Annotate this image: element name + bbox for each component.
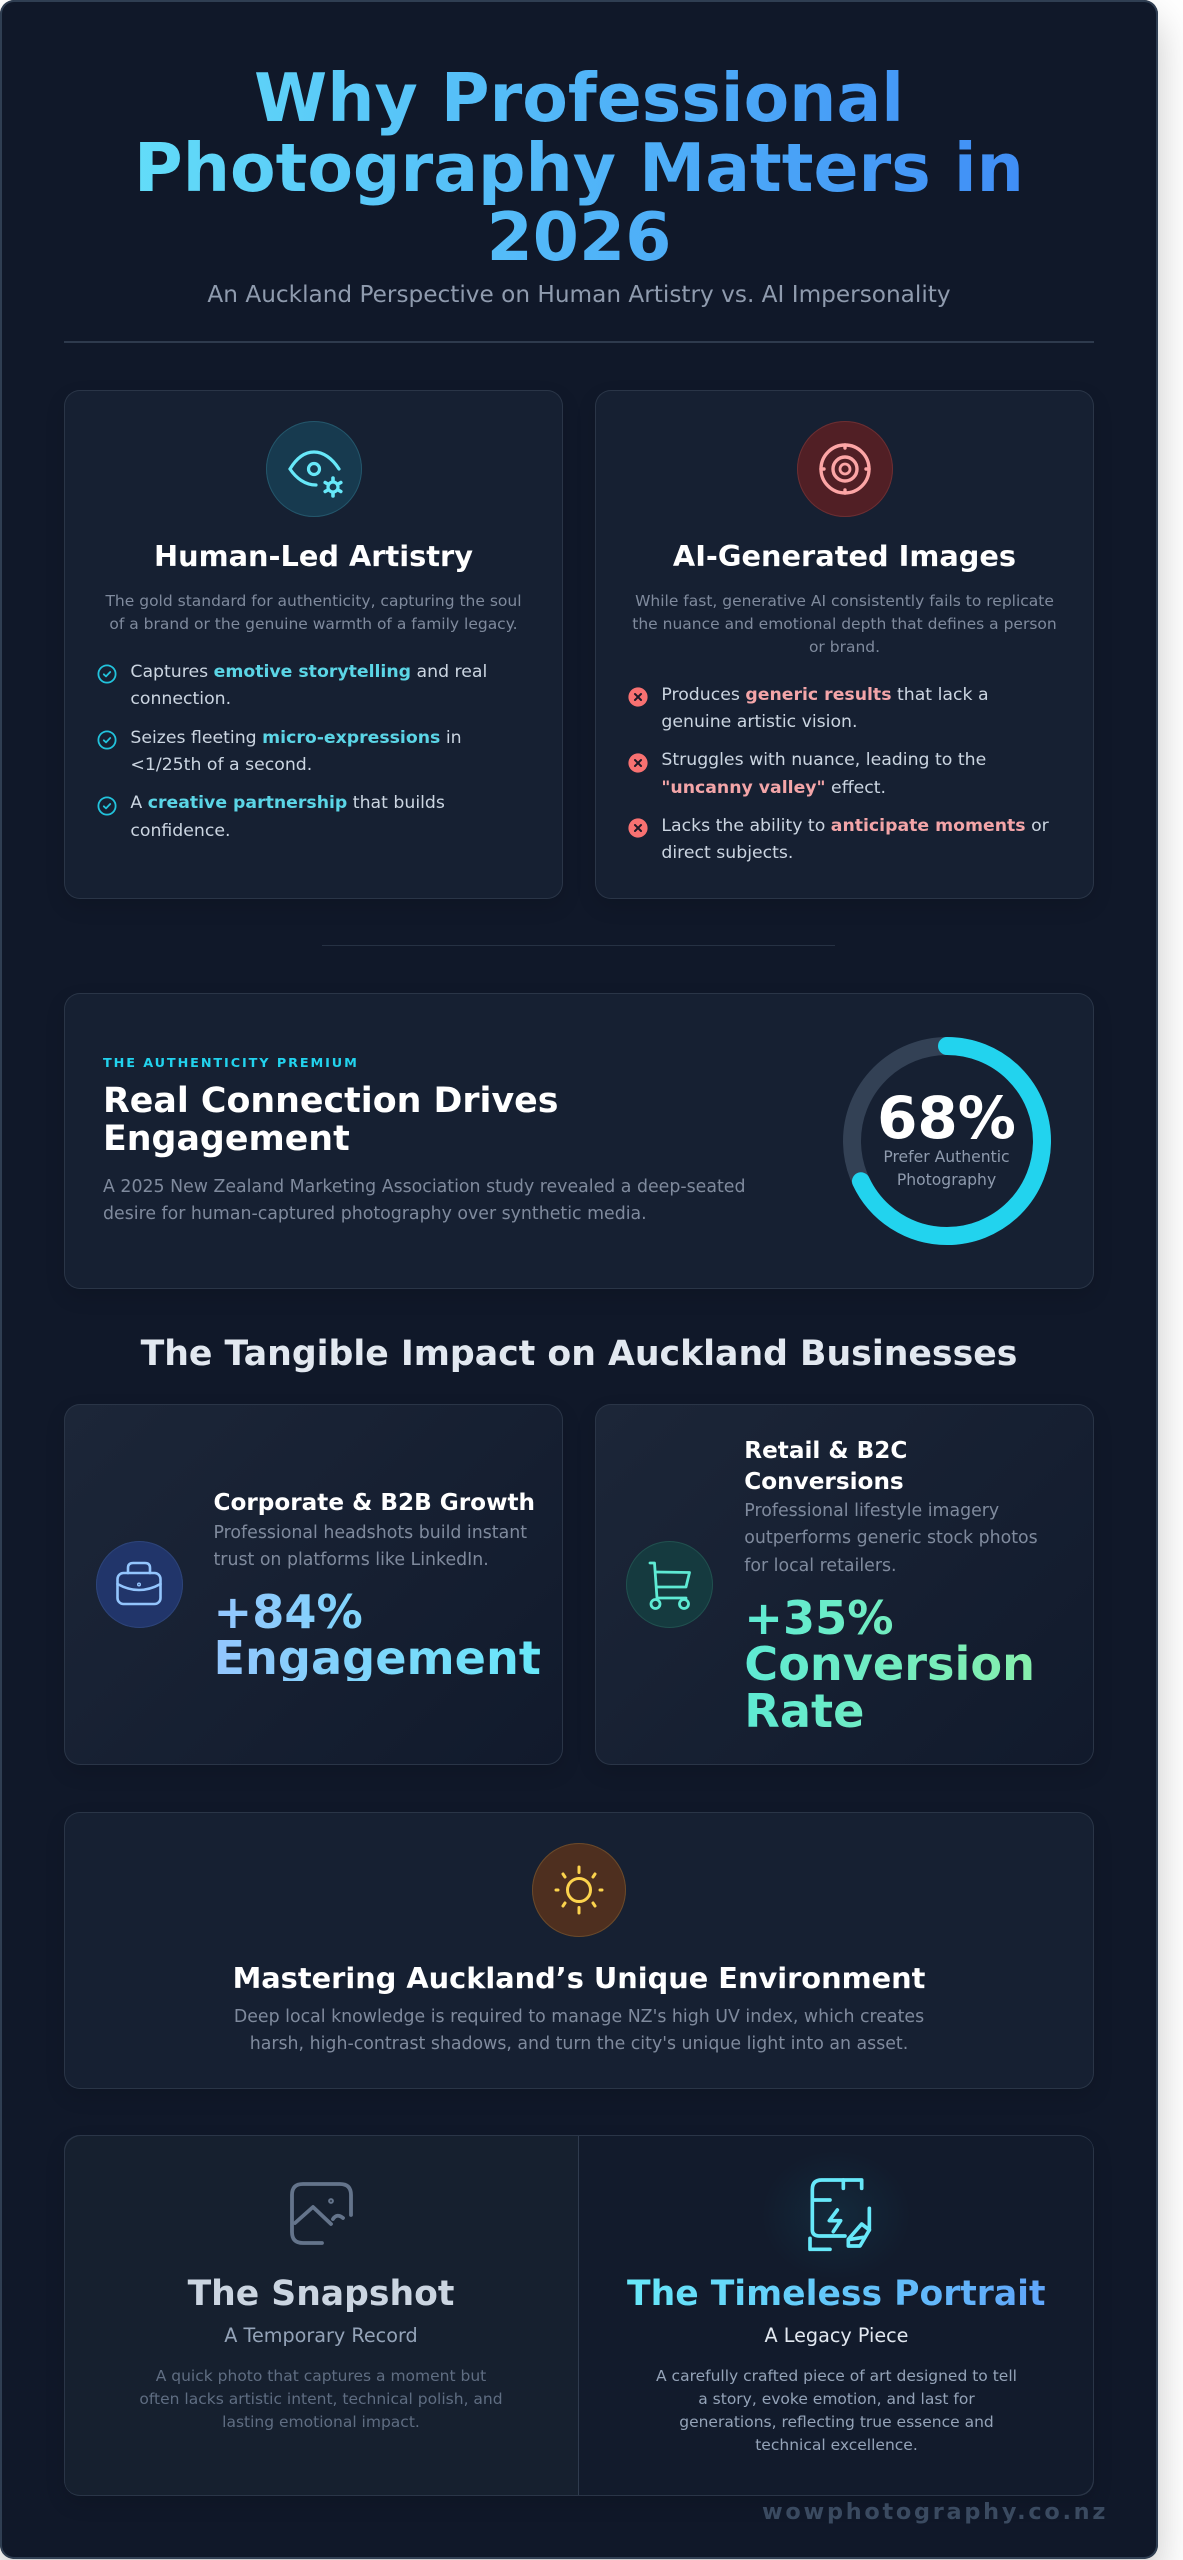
panel: retail and b2c — [595, 1404, 1094, 1765]
stat label — [883, 1148, 1010, 1189]
subtitle: temporary record: A Temporary Record — [224, 2324, 418, 2346]
sub-panel: the snapshot — [64, 2135, 579, 2496]
stat: plus 35 percent: Conversion — [744, 1637, 1035, 1691]
heading: human-led artistry: Human-Led Artistry — [154, 539, 473, 573]
list item: creative partnership: confidence. — [130, 821, 230, 841]
icon: check 3 — [98, 796, 116, 816]
stat: plus 84 percent: Engagement — [214, 1631, 541, 1685]
text: portrait description: technical excellence. — [755, 2436, 918, 2454]
heading: mastering auckland: Mastering Auckland’s Unique Environment — [233, 1961, 925, 1995]
panel: authenticity premium stat — [64, 993, 1094, 1289]
icon: sun — [532, 1843, 626, 1937]
title: Photography Matters in — [134, 129, 1024, 207]
footer: website: wowphotography.co.nz — [762, 2499, 1108, 2525]
subtitle: legacy piece: A Legacy Piece — [765, 2324, 908, 2346]
text: retail: for local retailers. — [744, 1556, 897, 1576]
text: human-led description: of a brand or the genuine warmth of a family legacy. — [109, 615, 518, 633]
stat: plus 84 percent — [214, 1588, 541, 1681]
panel: corporate and b2b — [64, 1404, 563, 1765]
text: portrait description — [656, 2366, 1017, 2454]
text: environment: Deep local knowledge is required to manage NZ's high UV index, which creates — [234, 2007, 924, 2027]
list item: anticipate moments: Lacks the ability to anticipate moments or — [661, 816, 1049, 836]
heading: ai-generated images: AI-Generated Images — [673, 539, 1016, 573]
text: snapshot description: A quick photo that captures a moment but — [156, 2366, 486, 2384]
icon: ai lens — [796, 421, 892, 517]
text: snapshot description: often lacks artistic intent, technical polish, and — [139, 2390, 503, 2408]
icon: check 1 — [98, 664, 116, 684]
icon: cross 3 — [628, 818, 648, 838]
icon: image placeholder — [290, 2182, 353, 2245]
panel: snapshot vs portrait comparison — [64, 2135, 1094, 2496]
stat label: Photography — [897, 1171, 996, 1189]
stat: plus 35 percent — [744, 1595, 1035, 1734]
title — [0, 64, 1158, 273]
text: snapshot description: lasting emotional impact. — [222, 2412, 420, 2430]
heading: the snapshot: The Snapshot — [188, 2274, 454, 2314]
list item: creative partnership: A creative partnership that builds — [130, 793, 445, 813]
heading: real connection — [103, 1080, 558, 1159]
heading: retail and b2c — [744, 1438, 907, 1495]
text: human-led description — [105, 592, 522, 633]
subtitle: An Auckland Perspective on Human Artistry vs. AI Impersonality — [207, 281, 951, 308]
heading: retail and b2c: Conversions — [744, 1469, 904, 1495]
list item: micro-expressions: <1/25th of a second. — [130, 755, 312, 775]
text: snapshot description — [139, 2366, 503, 2430]
title: Why Professional — [254, 59, 904, 137]
icon: eye with gear — [266, 421, 362, 517]
heading: real connection: Real Connection Drives — [103, 1080, 558, 1120]
heading: the timeless portrait: The Timeless Portrait — [627, 2274, 1046, 2314]
text: portrait description: generations, reflecting true essence and — [679, 2412, 994, 2430]
panel: ai-generated images — [595, 390, 1094, 899]
list item: anticipate moments: direct subjects. — [661, 843, 793, 863]
list item: uncanny valley: "uncanny valley" effect. — [661, 778, 886, 798]
text: retail — [744, 1501, 1038, 1576]
list item: generic results: Produces generic results that lack a — [661, 685, 989, 705]
panel: auckland environment — [64, 1812, 1094, 2089]
sub-panel: the timeless portrait — [579, 2135, 1094, 2496]
text: corporate: trust on platforms like LinkedIn. — [214, 1550, 489, 1570]
list item: anticipate moments — [661, 816, 1049, 863]
stat: plus 35 percent: Rate — [744, 1684, 864, 1738]
icon: briefcase — [96, 1541, 182, 1628]
text: environment — [234, 2007, 924, 2054]
list item: emotive storytelling: Captures emotive storytelling and real — [130, 662, 487, 682]
list item: generic results — [661, 685, 989, 732]
list item: generic results: genuine artistic vision. — [661, 712, 857, 732]
icon: shopping cart — [626, 1541, 713, 1628]
text: retail: Professional lifestyle imagery — [744, 1501, 999, 1521]
text: study: desire for human-captured photography over synthetic media. — [103, 1204, 647, 1224]
text: environment: harsh, high-contrast shadows, and turn the city's unique light into an asset. — [250, 2034, 908, 2054]
chart: 68 percent ring — [843, 1037, 1051, 1245]
text: portrait description: A carefully crafted piece of art designed to tell — [656, 2366, 1017, 2384]
stat: plus 84 percent: +84% — [214, 1584, 363, 1638]
text: retail: outperforms generic stock photos — [744, 1528, 1038, 1548]
text: study — [103, 1176, 746, 1224]
heading: corporate and b2b: Corporate & B2B Growth — [214, 1490, 535, 1516]
text: study: A 2025 New Zealand Marketing Association study revealed a deep-seated — [103, 1176, 746, 1196]
text: ai description: the nuance and emotional depth that defines a person — [632, 615, 1057, 633]
list item: creative partnership — [130, 793, 445, 841]
list item: uncanny valley — [661, 750, 986, 798]
icon: portrait with pen and bolt — [808, 2178, 872, 2252]
list item: emotive storytelling: connection. — [130, 689, 231, 709]
panel: human-led artistry — [64, 390, 563, 899]
stat: plus 35 percent: +35% — [744, 1591, 894, 1645]
text: corporate: Professional headshots build instant — [214, 1522, 527, 1542]
text: portrait description: a story, evoke emotion, and last for — [698, 2390, 975, 2408]
section heading: The Tangible Impact on Auckland Businesses — [141, 1334, 1017, 1374]
heading: real connection: Engagement — [103, 1119, 350, 1159]
icon: check 2 — [98, 730, 116, 750]
eyebrow: THE AUTHENTICITY PREMIUM — [103, 1056, 359, 1071]
stat label: Prefer Authentic — [883, 1148, 1010, 1166]
stat value: 68% — [877, 1084, 1016, 1152]
list item: micro-expressions — [130, 728, 462, 775]
title: 2026 — [487, 198, 671, 276]
text: ai description — [632, 592, 1057, 656]
icon: cross 2 — [628, 753, 648, 773]
list item: uncanny valley: Struggles with nuance, leading to the — [661, 750, 986, 770]
list item: micro-expressions: Seizes fleeting micro-expressions in — [130, 728, 462, 748]
icon: cross 1 — [628, 687, 648, 707]
list item: emotive storytelling — [130, 662, 487, 709]
text: ai description: or brand. — [809, 638, 880, 656]
text: ai description: While fast, generative AI consistently fails to replicate — [635, 592, 1054, 610]
text: human-led description: The gold standard for authenticity, capturing the soul — [105, 592, 522, 610]
text: corporate — [214, 1522, 527, 1570]
heading: retail and b2c: Retail & B2C — [744, 1438, 907, 1464]
